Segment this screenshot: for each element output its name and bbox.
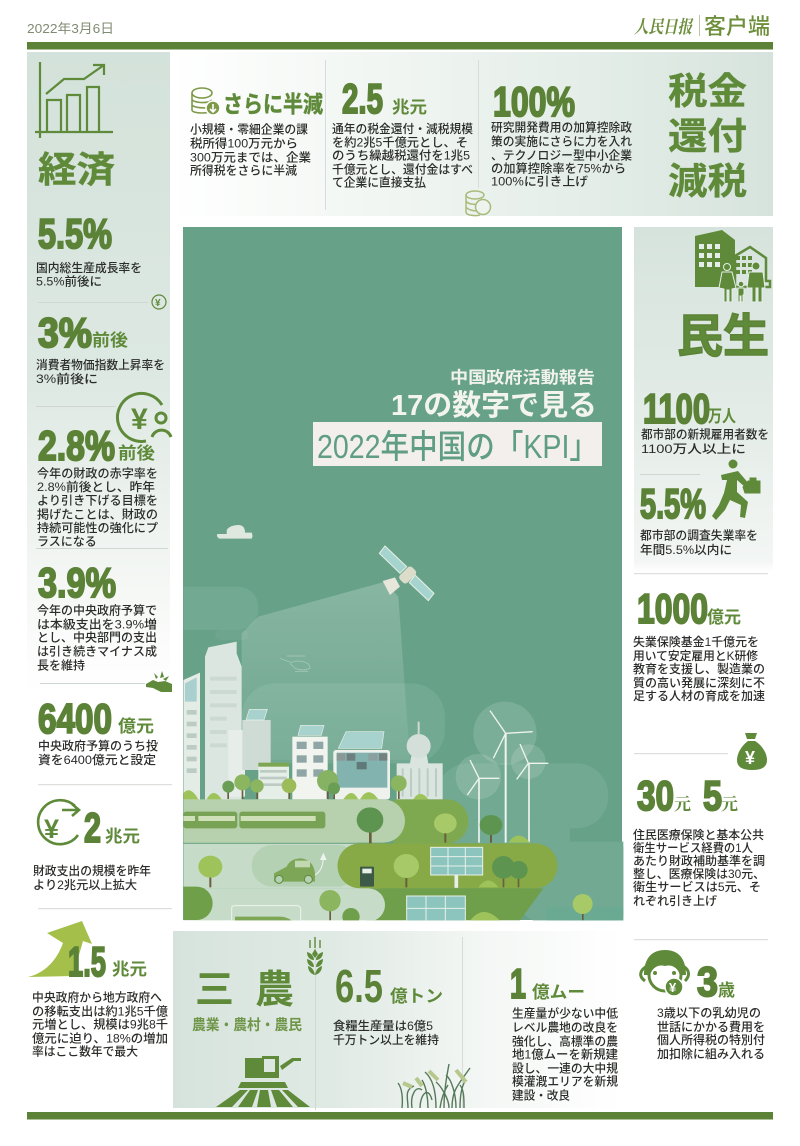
stat: 6400: 億元 bbox=[118, 717, 154, 736]
stat: 100 million mu: 建設・改良 bbox=[512, 1088, 570, 1102]
stat: under age 3: 3 bbox=[697, 958, 718, 1005]
stat: 2 trillion yuan with icon: より2兆元以上拡大 bbox=[33, 877, 137, 892]
stat: 2.8%: 2.8% bbox=[38, 422, 115, 469]
bus outline bbox=[232, 906, 301, 921]
stat: 30 yuan and 5 yuan: あたり財政補助基準を調 bbox=[633, 853, 765, 868]
stat: 6400: 中央政府予算のうち投 bbox=[38, 738, 158, 753]
stat: halved further: 小規模・零細企業の課 bbox=[190, 122, 308, 136]
icon: rice plants bbox=[398, 1064, 470, 1108]
stat: 3.9%: は本級支出を3.9%増 bbox=[37, 616, 157, 632]
stat: 650 million tons: 6.5 bbox=[335, 960, 383, 1012]
stat: 2.5 trillion yuan: 通年の税金還付・減税規模 bbox=[332, 121, 473, 136]
stat: 100 million mu: レベル農地の改良を bbox=[512, 1020, 618, 1034]
logo: People's Daily client: 客户端 bbox=[704, 14, 770, 39]
stat: under age 3: 個人所得税の特別付 bbox=[657, 1032, 765, 1047]
heading: three rural issues: 農業・農村・農民 bbox=[192, 1016, 302, 1034]
stat: 30 yuan and 5 yuan: 元 bbox=[721, 790, 738, 815]
stat: 11 million: 都市部の新規雇用者数を bbox=[641, 426, 769, 442]
panel: central cover illustration bbox=[160, 227, 630, 925]
stat: 100%: 策の実施にさらに力を入れ bbox=[491, 134, 632, 148]
trees bbox=[183, 770, 593, 925]
stat: 3.9% bbox=[37, 559, 157, 672]
stat: 5.5% unemployment: 都市部の調査失業率を bbox=[640, 528, 758, 542]
stat: 6400: 資を6400億元と設定 bbox=[38, 752, 156, 767]
stat: under age 3: 歳 bbox=[718, 981, 735, 1000]
charging post bbox=[360, 867, 374, 887]
stat: 3%: 3% bbox=[38, 309, 92, 356]
light beam bbox=[242, 582, 410, 760]
stat: 30 yuan and 5 yuan: 元 bbox=[674, 790, 691, 815]
stat: halved further: さらに半減 bbox=[223, 91, 323, 117]
stat: 30 yuan and 5 yuan: 住民医療保険と基本公共 bbox=[633, 827, 764, 842]
stat: 2.5 trillion yuan: 千億元とし、還付金はすべ bbox=[332, 162, 473, 176]
stat: 100%: の加算控除率を75%から bbox=[491, 160, 626, 176]
stat: 1.5 trillion yuan with arrow: 億元に迫り、18%の増加 bbox=[32, 1030, 168, 1046]
stat: 2 trillion yuan with icon: 財政支出の規模を昨年 bbox=[33, 863, 151, 878]
stat: 650 million tons bbox=[333, 960, 443, 1047]
stat: halved further: 300万元までは、企業 bbox=[190, 150, 311, 164]
stat: 30 yuan and 5 yuan: 衛生サービス経費の1人 bbox=[633, 840, 753, 855]
heading: tax refunds and cuts: 還付 bbox=[668, 116, 747, 157]
heading: tax refunds and cuts: 税金 bbox=[668, 71, 747, 112]
stat: 100 billion yuan: 1000 bbox=[637, 585, 708, 632]
illustration: green city bbox=[160, 525, 630, 925]
logo: People's Daily client bbox=[634, 13, 770, 39]
stat: 3%: 消費者物価指数上昇率を bbox=[36, 357, 165, 372]
panel: three rural issues bbox=[173, 931, 623, 1110]
stat: 1.5 trillion yuan with arrow bbox=[28, 921, 168, 1058]
stat: under age 3: 3歳以下の乳幼児の bbox=[657, 1006, 761, 1020]
stat: 5.5% unemployment: 5.5% bbox=[640, 480, 706, 527]
stat: 2.8% bbox=[37, 422, 158, 548]
stat: under age 3: 加扣除に組み入れる bbox=[657, 1046, 765, 1061]
stat: 3.9%: は引き続きマイナス成 bbox=[37, 644, 157, 658]
stat: 100 million mu: 億ムー bbox=[532, 983, 585, 1002]
stat: 2.5 trillion yuan bbox=[332, 75, 473, 190]
icon: hand with sprout bbox=[146, 671, 172, 692]
panel: tax refunds and cuts bbox=[170, 52, 773, 216]
stat: 100%: 100% bbox=[493, 78, 575, 125]
stat: 100 billion yuan: 質の高い発展に深刻に不 bbox=[633, 675, 765, 690]
stat: 1.5 trillion yuan with arrow: の移転支出は約1兆5千億 bbox=[32, 1004, 168, 1018]
stat: 650 million tons: 食糧生産量は6億5 bbox=[333, 1018, 433, 1033]
stat: 2.5 trillion yuan: を約2兆5千億元とし、そ bbox=[332, 134, 468, 150]
icon: combine harvester bbox=[216, 1056, 310, 1107]
stat: 3.9%: 3.9% bbox=[38, 559, 116, 606]
hills and roads bbox=[183, 799, 623, 922]
panel: economy bbox=[27, 52, 172, 692]
heading: three rural issues: 三 bbox=[195, 969, 234, 1012]
icon: child with yuan coin: ¥ bbox=[669, 980, 677, 995]
stat: 30 yuan and 5 yuan: 30 bbox=[637, 772, 674, 819]
stat: under age 3: 世話にかかる費用を bbox=[657, 1019, 765, 1034]
stat: 100 million mu: 模灌漑エリアを新規 bbox=[512, 1074, 618, 1088]
stat: 100 billion yuan: 億元 bbox=[707, 608, 741, 627]
stat: 2.8%: 掲げたことは、財政の bbox=[37, 506, 158, 522]
stat: 100 billion yuan: 足する人材の育成を加速 bbox=[633, 688, 765, 703]
icon: money bag: ¥ bbox=[745, 748, 755, 768]
icon: money bag bbox=[737, 733, 767, 770]
train bbox=[183, 812, 325, 828]
icon: green arrow bbox=[28, 921, 92, 977]
stat: 1.5 trillion yuan with arrow: 兆元 bbox=[112, 960, 147, 979]
stat: 5.5%: 国内総生産成長率を bbox=[36, 260, 142, 275]
panel: livelihood bbox=[634, 227, 773, 572]
stat: 11 million: 1100 bbox=[643, 385, 710, 432]
stat: 3%: 3%前後に bbox=[36, 371, 98, 386]
stat: 650 million tons: 億トン bbox=[390, 987, 443, 1006]
heading: tax refunds and cuts: 減税 bbox=[668, 161, 747, 202]
stat: 5.5%: 5.5%前後に bbox=[36, 274, 102, 288]
stat: 2.5 trillion yuan: て企業に直接支払 bbox=[332, 174, 426, 190]
stat: 100 million mu: 地1億ムーを新規建 bbox=[512, 1046, 618, 1062]
stat: 100%: 、テクノロジー型中小企業 bbox=[491, 148, 632, 162]
stat: 2.8%: より引き下げる目標を bbox=[37, 492, 158, 508]
logo: People's Daily client: 人民日报 bbox=[634, 13, 694, 39]
stat: 6400: 6400 bbox=[38, 695, 112, 742]
stat: 100 billion yuan: 用いて安定雇用とK研修 bbox=[633, 648, 758, 663]
stat: 100 million mu: 生産量が少ない中低 bbox=[512, 1006, 618, 1020]
stat: 100%: 研究開発費用の加算控除政 bbox=[491, 120, 632, 134]
heading: tax refunds and cuts bbox=[668, 71, 747, 202]
wind turbines bbox=[456, 702, 548, 843]
sky clouds bbox=[160, 587, 630, 922]
stat: 3%: 前後 bbox=[92, 330, 128, 350]
stat: 6400 bbox=[38, 695, 158, 767]
stat: 2 trillion yuan with icon: 2 bbox=[84, 804, 101, 851]
stat: 100%: 100%に引き上げ bbox=[491, 174, 588, 188]
stat: 5.5% bbox=[36, 210, 142, 288]
stat: 2 trillion yuan with icon bbox=[33, 800, 151, 892]
stat: 2.5 trillion yuan: のうち繰越税還付を1兆5 bbox=[332, 148, 470, 162]
icon: runner with briefcase bbox=[712, 460, 760, 520]
stat: 3% bbox=[36, 309, 165, 386]
icon: helicopter bbox=[280, 656, 310, 672]
bottom bar bbox=[27, 1112, 773, 1120]
stat: 100 million mu bbox=[510, 960, 618, 1102]
stat: 650 million tons: 千万トン以上を維持 bbox=[333, 1032, 439, 1047]
stat: 11 million bbox=[641, 385, 769, 456]
stat: halved further: 税所得100万元から bbox=[190, 136, 298, 150]
cover title: 17の数字で見る bbox=[391, 389, 597, 422]
stat: 2.8%: ラスになる bbox=[37, 534, 97, 548]
stat: 3.9%: とし、中央部門の支出 bbox=[37, 630, 157, 644]
stat: 3.9%: 今年の中央政府予算で bbox=[37, 602, 157, 618]
stat: 2.5 trillion yuan: 兆元 bbox=[392, 98, 427, 117]
heading: three rural issues bbox=[192, 969, 302, 1034]
icon: coins bbox=[466, 191, 490, 216]
stat: 2.8%: 前後 bbox=[118, 443, 155, 463]
stat: 100 billion yuan: 教育を支援し、製造業の bbox=[633, 661, 765, 676]
stat: 2.8%: 2.8%前後とし、昨年 bbox=[37, 479, 155, 494]
icon: yuan cycle bbox=[152, 295, 166, 309]
icon: yuan cycle: ¥ bbox=[155, 298, 161, 309]
stat: 2.8%: 今年の財政の赤字率を bbox=[37, 466, 158, 480]
top bar bbox=[27, 42, 773, 50]
stat: 5.5% unemployment: 年間5.5%以内に bbox=[640, 542, 732, 557]
icon: yuan and person bbox=[117, 393, 171, 441]
city buildings bbox=[183, 642, 443, 800]
heading: three rural issues: 農 bbox=[255, 969, 294, 1012]
stat: 30 yuan and 5 yuan: れぞれ引き上げ bbox=[633, 894, 717, 908]
stat: 30 yuan and 5 yuan: 衛生サービスは5元、そ bbox=[633, 879, 761, 894]
stat: 1.5 trillion yuan with arrow: 率はここ数年で最大 bbox=[32, 1044, 138, 1058]
stat: 30 yuan and 5 yuan: 5 bbox=[703, 772, 722, 819]
stat: 100 million mu: 設し、一連の大中規 bbox=[512, 1060, 618, 1076]
stat: 2.5 trillion yuan: 2.5 bbox=[342, 75, 383, 122]
stat: 1.5 trillion yuan with arrow: 元増とし、規模は9兆8千 bbox=[32, 1016, 168, 1032]
stat: 2 trillion yuan with icon: 兆元 bbox=[105, 827, 140, 846]
cover title box: 2022年中国の「KPI」 bbox=[317, 428, 598, 465]
stat: 11 million: 1100万人以上に bbox=[641, 442, 746, 456]
electric car bbox=[274, 853, 327, 883]
stat: 100 billion yuan bbox=[633, 585, 765, 703]
stat: 100% bbox=[491, 78, 632, 188]
stat: halved further bbox=[190, 91, 323, 178]
date: 2022年3月6日 bbox=[27, 21, 114, 36]
stat: 3.9%: 長を維持 bbox=[37, 658, 85, 672]
stat: 1.5 trillion yuan with arrow: 中央政府から地方政府へ bbox=[32, 990, 162, 1004]
icon: wheat bbox=[307, 937, 323, 975]
stat: 2 trillion yuan with icon: ¥ bbox=[44, 814, 59, 844]
icon: growth chart bbox=[35, 62, 113, 138]
solar panels bbox=[407, 847, 483, 921]
stat: 5.5%: 5.5% bbox=[38, 210, 112, 257]
icon: satellite bbox=[379, 546, 434, 601]
cover subtitle: 中国政府活動報告 bbox=[450, 368, 595, 387]
stat: 100 million mu: 強化し、高標準の農 bbox=[512, 1034, 618, 1048]
stat: 1.5 trillion yuan with arrow: 1.5 bbox=[68, 938, 106, 985]
stat: under age 3 bbox=[641, 950, 765, 1061]
icon: yuan and person: ¥ bbox=[131, 403, 148, 436]
stat: 30 yuan and 5 yuan: 整し、医療保険は30元、 bbox=[633, 866, 765, 881]
stat: 100 billion yuan: 失業保険基金1千億元を bbox=[633, 634, 759, 649]
icon: coin stack with down arrow bbox=[192, 88, 220, 115]
heading: economy: 経済 bbox=[38, 149, 115, 190]
stat: 100 million mu: 1 bbox=[510, 960, 526, 1007]
heading: livelihood: 民生 bbox=[677, 310, 769, 362]
stat: 5.5% unemployment bbox=[640, 480, 758, 557]
stat: 2.8%: 持続可能性の強化にプ bbox=[37, 520, 158, 535]
stat: halved further: 所得税をさらに半減 bbox=[190, 162, 297, 178]
icon: buildings and family bbox=[695, 230, 770, 302]
stat: 11 million: 万人 bbox=[708, 407, 736, 426]
stat: 30 yuan and 5 yuan bbox=[633, 772, 765, 908]
